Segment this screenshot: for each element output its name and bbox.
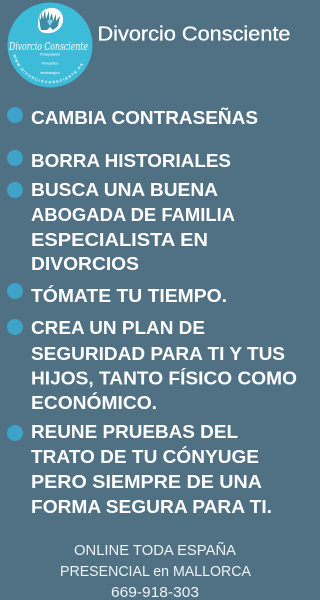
logo tags: #estratégico xyxy=(40,71,60,75)
title: Divorcio Consciente xyxy=(98,22,290,46)
checklist xyxy=(7,107,297,517)
item: tómate tu tiempo: TÓMATE TU TIEMPO. xyxy=(31,285,227,306)
item: reune pruebas: REUNE PRUEBAS DEL xyxy=(31,421,238,442)
item: reune pruebas: PERO SIEMPRE DE UNA xyxy=(31,471,262,492)
item: plan de seguridad: CREA UN PLAN DE xyxy=(31,317,205,338)
item: busca abogada: BUSCA UNA BUENA xyxy=(31,179,218,200)
icon: hands in white blob xyxy=(38,8,63,33)
item: plan de seguridad xyxy=(7,317,297,413)
item: busca abogada: DIVORCIOS xyxy=(31,253,139,274)
item: busca abogada: ABOGADA DE FAMILIA xyxy=(31,204,235,225)
item: reune pruebas: TRATO DE TU CÓNYUGE xyxy=(31,446,259,467)
footer contact: ONLINE TODA ESPAÑA xyxy=(74,542,236,559)
item: plan de seguridad: ECONÓMICO. xyxy=(31,392,157,413)
item: busca abogada: ESPECIALISTA EN xyxy=(31,229,208,250)
item: reune pruebas: FORMA SEGURA PARA TI. xyxy=(31,496,272,517)
item: plan de seguridad: HIJOS, TANTO FÍSICO COMO xyxy=(31,368,297,388)
footer contact xyxy=(60,542,251,600)
item: plan de seguridad: SEGURIDAD PARA TI Y TUS xyxy=(31,343,285,364)
logo tags xyxy=(40,52,60,75)
logo badge xyxy=(8,2,92,88)
item: busca abogada xyxy=(7,179,235,274)
item: cambia contraseñas: CAMBIA CONTRASEÑAS xyxy=(31,107,258,128)
item: borra historiales: BORRA HISTORIALES xyxy=(31,150,231,171)
logo tags: #empático xyxy=(42,62,58,66)
footer contact: PRESENCIAL en MALLORCA xyxy=(60,564,251,580)
item: reune pruebas xyxy=(7,421,272,517)
logo tags: #maquiavelo xyxy=(40,52,60,56)
logo script name: Divorcio Consciente xyxy=(8,40,88,53)
logo curved web address: WWW.DIVORCIOCONSCIENTE.ES xyxy=(13,54,83,84)
